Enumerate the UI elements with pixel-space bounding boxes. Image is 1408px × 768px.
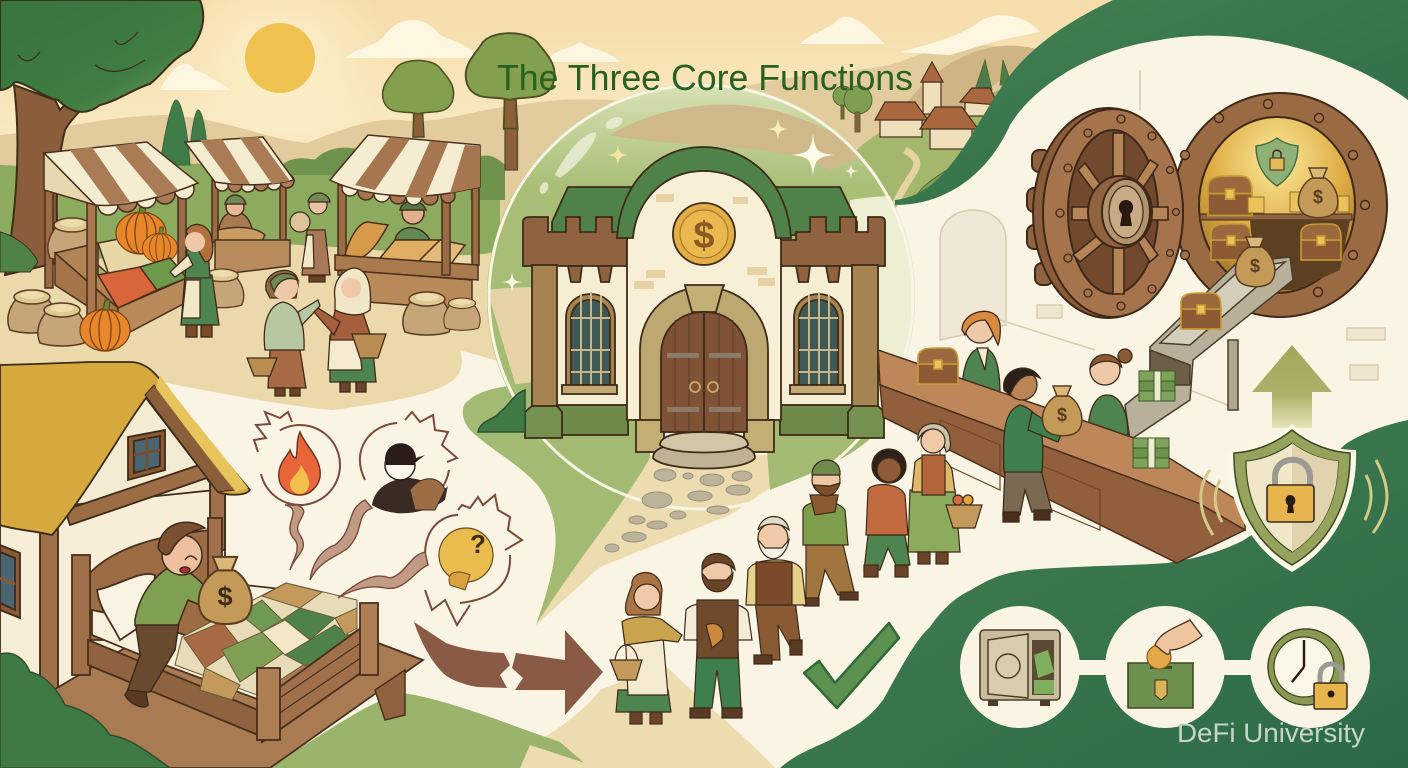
steps — [653, 432, 755, 468]
headboard — [88, 530, 210, 640]
cottage wall — [0, 400, 225, 700]
stone door arch — [640, 287, 768, 432]
queue person: boy — [864, 449, 910, 577]
upper money bag: $ — [1313, 187, 1323, 207]
tail thief — [310, 500, 372, 580]
cloud far right — [900, 15, 1040, 55]
money bag at counter: $ — [1057, 405, 1067, 425]
icon: time lock — [1250, 606, 1370, 728]
bottom grass — [268, 693, 590, 768]
green side roofs — [552, 187, 857, 235]
market woman green apron — [170, 224, 219, 337]
side walls — [556, 260, 854, 410]
watermark: DeFi University — [1177, 718, 1366, 748]
window left — [562, 292, 617, 394]
cloud centre — [345, 20, 478, 58]
tree tall — [466, 33, 555, 170]
right lawn — [765, 425, 883, 490]
broken arrow tail — [414, 622, 510, 688]
worried man — [125, 522, 212, 707]
vault rivets — [1180, 100, 1370, 296]
basket left — [247, 358, 277, 376]
tree small — [383, 60, 454, 137]
produce sacks left — [8, 269, 244, 346]
footboard — [262, 625, 365, 742]
bed frame rail — [88, 640, 258, 735]
teller two — [1088, 349, 1132, 435]
center wall — [627, 170, 781, 420]
shield with lock — [1228, 424, 1356, 572]
cottage — [0, 362, 250, 700]
stall 3 vendor — [395, 201, 430, 240]
worry bubble: thief — [360, 412, 457, 513]
dome highlights — [538, 115, 624, 195]
cypress trees — [160, 100, 207, 165]
cloud upper — [545, 42, 620, 62]
timber beam — [65, 463, 210, 525]
money bag on conveyor: $ — [1250, 256, 1260, 276]
landscape scene — [0, 0, 1120, 430]
icon connectors — [1075, 660, 1255, 675]
crate of oranges — [98, 267, 157, 308]
market stall 2 — [185, 137, 294, 275]
vault upper shelf — [1200, 214, 1352, 220]
cloud left — [160, 64, 232, 90]
queue person: older woman — [908, 424, 982, 564]
queue person: old man — [746, 516, 806, 664]
produce sacks right — [403, 292, 480, 335]
vault door lock — [1088, 176, 1152, 248]
worry bubble: question — [425, 495, 522, 625]
money bag at counter — [1042, 386, 1082, 436]
queue person: man with vest — [684, 554, 752, 718]
stone path — [605, 469, 752, 552]
side window — [0, 545, 20, 618]
distant trees by village — [833, 60, 1012, 132]
thatched roof — [0, 362, 250, 535]
bottom tan corner — [520, 745, 600, 768]
sun — [245, 23, 315, 93]
sound arcs — [1201, 460, 1387, 535]
deck — [50, 643, 423, 768]
worry bubble: fire — [245, 410, 355, 520]
bed — [72, 518, 378, 742]
corbels — [568, 266, 840, 282]
up arrow — [1252, 345, 1332, 428]
gold coins — [1248, 192, 1349, 213]
crenellated parapets — [523, 217, 885, 266]
pumpkin foreground — [80, 300, 130, 351]
customer at counter — [1003, 368, 1062, 522]
bank building — [523, 147, 885, 468]
gold coin: $ — [693, 215, 715, 257]
stone path ground — [536, 455, 770, 625]
chest on counter — [918, 348, 958, 384]
pillow — [97, 574, 155, 640]
conveyor belt — [1125, 257, 1293, 440]
vault frame — [1173, 93, 1387, 317]
bush bottom left — [0, 653, 170, 768]
icon: safe — [960, 606, 1080, 728]
money on conveyor — [1139, 371, 1175, 401]
cloud right — [800, 17, 885, 44]
chest on conveyor — [1181, 293, 1221, 329]
market woman with brown skirt — [247, 270, 320, 396]
upper money bag — [1298, 168, 1338, 218]
market stall 3 — [330, 135, 480, 310]
vault back wall arch — [940, 70, 1385, 410]
village — [875, 62, 998, 149]
patchwork quilt — [175, 583, 357, 700]
money bag on conveyor — [1235, 237, 1275, 287]
money on counter — [1133, 438, 1169, 468]
market woman far — [290, 193, 330, 282]
queue person: bearded man — [803, 460, 858, 606]
cottage window — [128, 430, 165, 480]
vault shield — [1256, 138, 1298, 186]
protective dome — [480, 80, 920, 509]
window right — [790, 292, 845, 394]
checkmark — [804, 623, 899, 708]
broken arrow head — [512, 630, 603, 715]
counter — [878, 350, 1245, 563]
arched door — [661, 312, 747, 432]
large tree — [0, 0, 203, 275]
money bag on bed: $ — [217, 581, 233, 611]
money bag on bed — [199, 557, 252, 624]
wall bricks — [634, 194, 775, 289]
pillars — [532, 265, 878, 410]
basket right — [352, 334, 386, 358]
stall 2 vendor — [218, 195, 254, 240]
green plinths — [558, 405, 852, 435]
green swoosh top right — [895, 0, 1408, 205]
title: The Three Core Functions — [497, 57, 913, 98]
sparkles — [502, 118, 858, 292]
worry bubble: question: ? — [470, 529, 486, 559]
tail question — [338, 552, 428, 598]
green region lower right — [780, 420, 1408, 768]
tail fire — [285, 505, 304, 570]
bottom tan path — [530, 665, 775, 768]
bush by bank — [478, 390, 525, 432]
bag on stall — [48, 218, 96, 261]
market stall 1 — [44, 142, 198, 332]
queue person: woman with basket — [610, 572, 682, 724]
left lawn — [463, 380, 650, 625]
market woman with headscarf — [314, 268, 386, 392]
door rivets — [1056, 115, 1180, 310]
green arch — [617, 147, 791, 238]
crate of greens — [140, 258, 187, 290]
mattress — [92, 610, 260, 700]
pumpkins on stall — [116, 203, 166, 254]
teller one — [962, 311, 1000, 395]
gold coin — [673, 203, 735, 265]
icon: deposit box — [1105, 606, 1225, 728]
vault door — [1027, 108, 1183, 318]
